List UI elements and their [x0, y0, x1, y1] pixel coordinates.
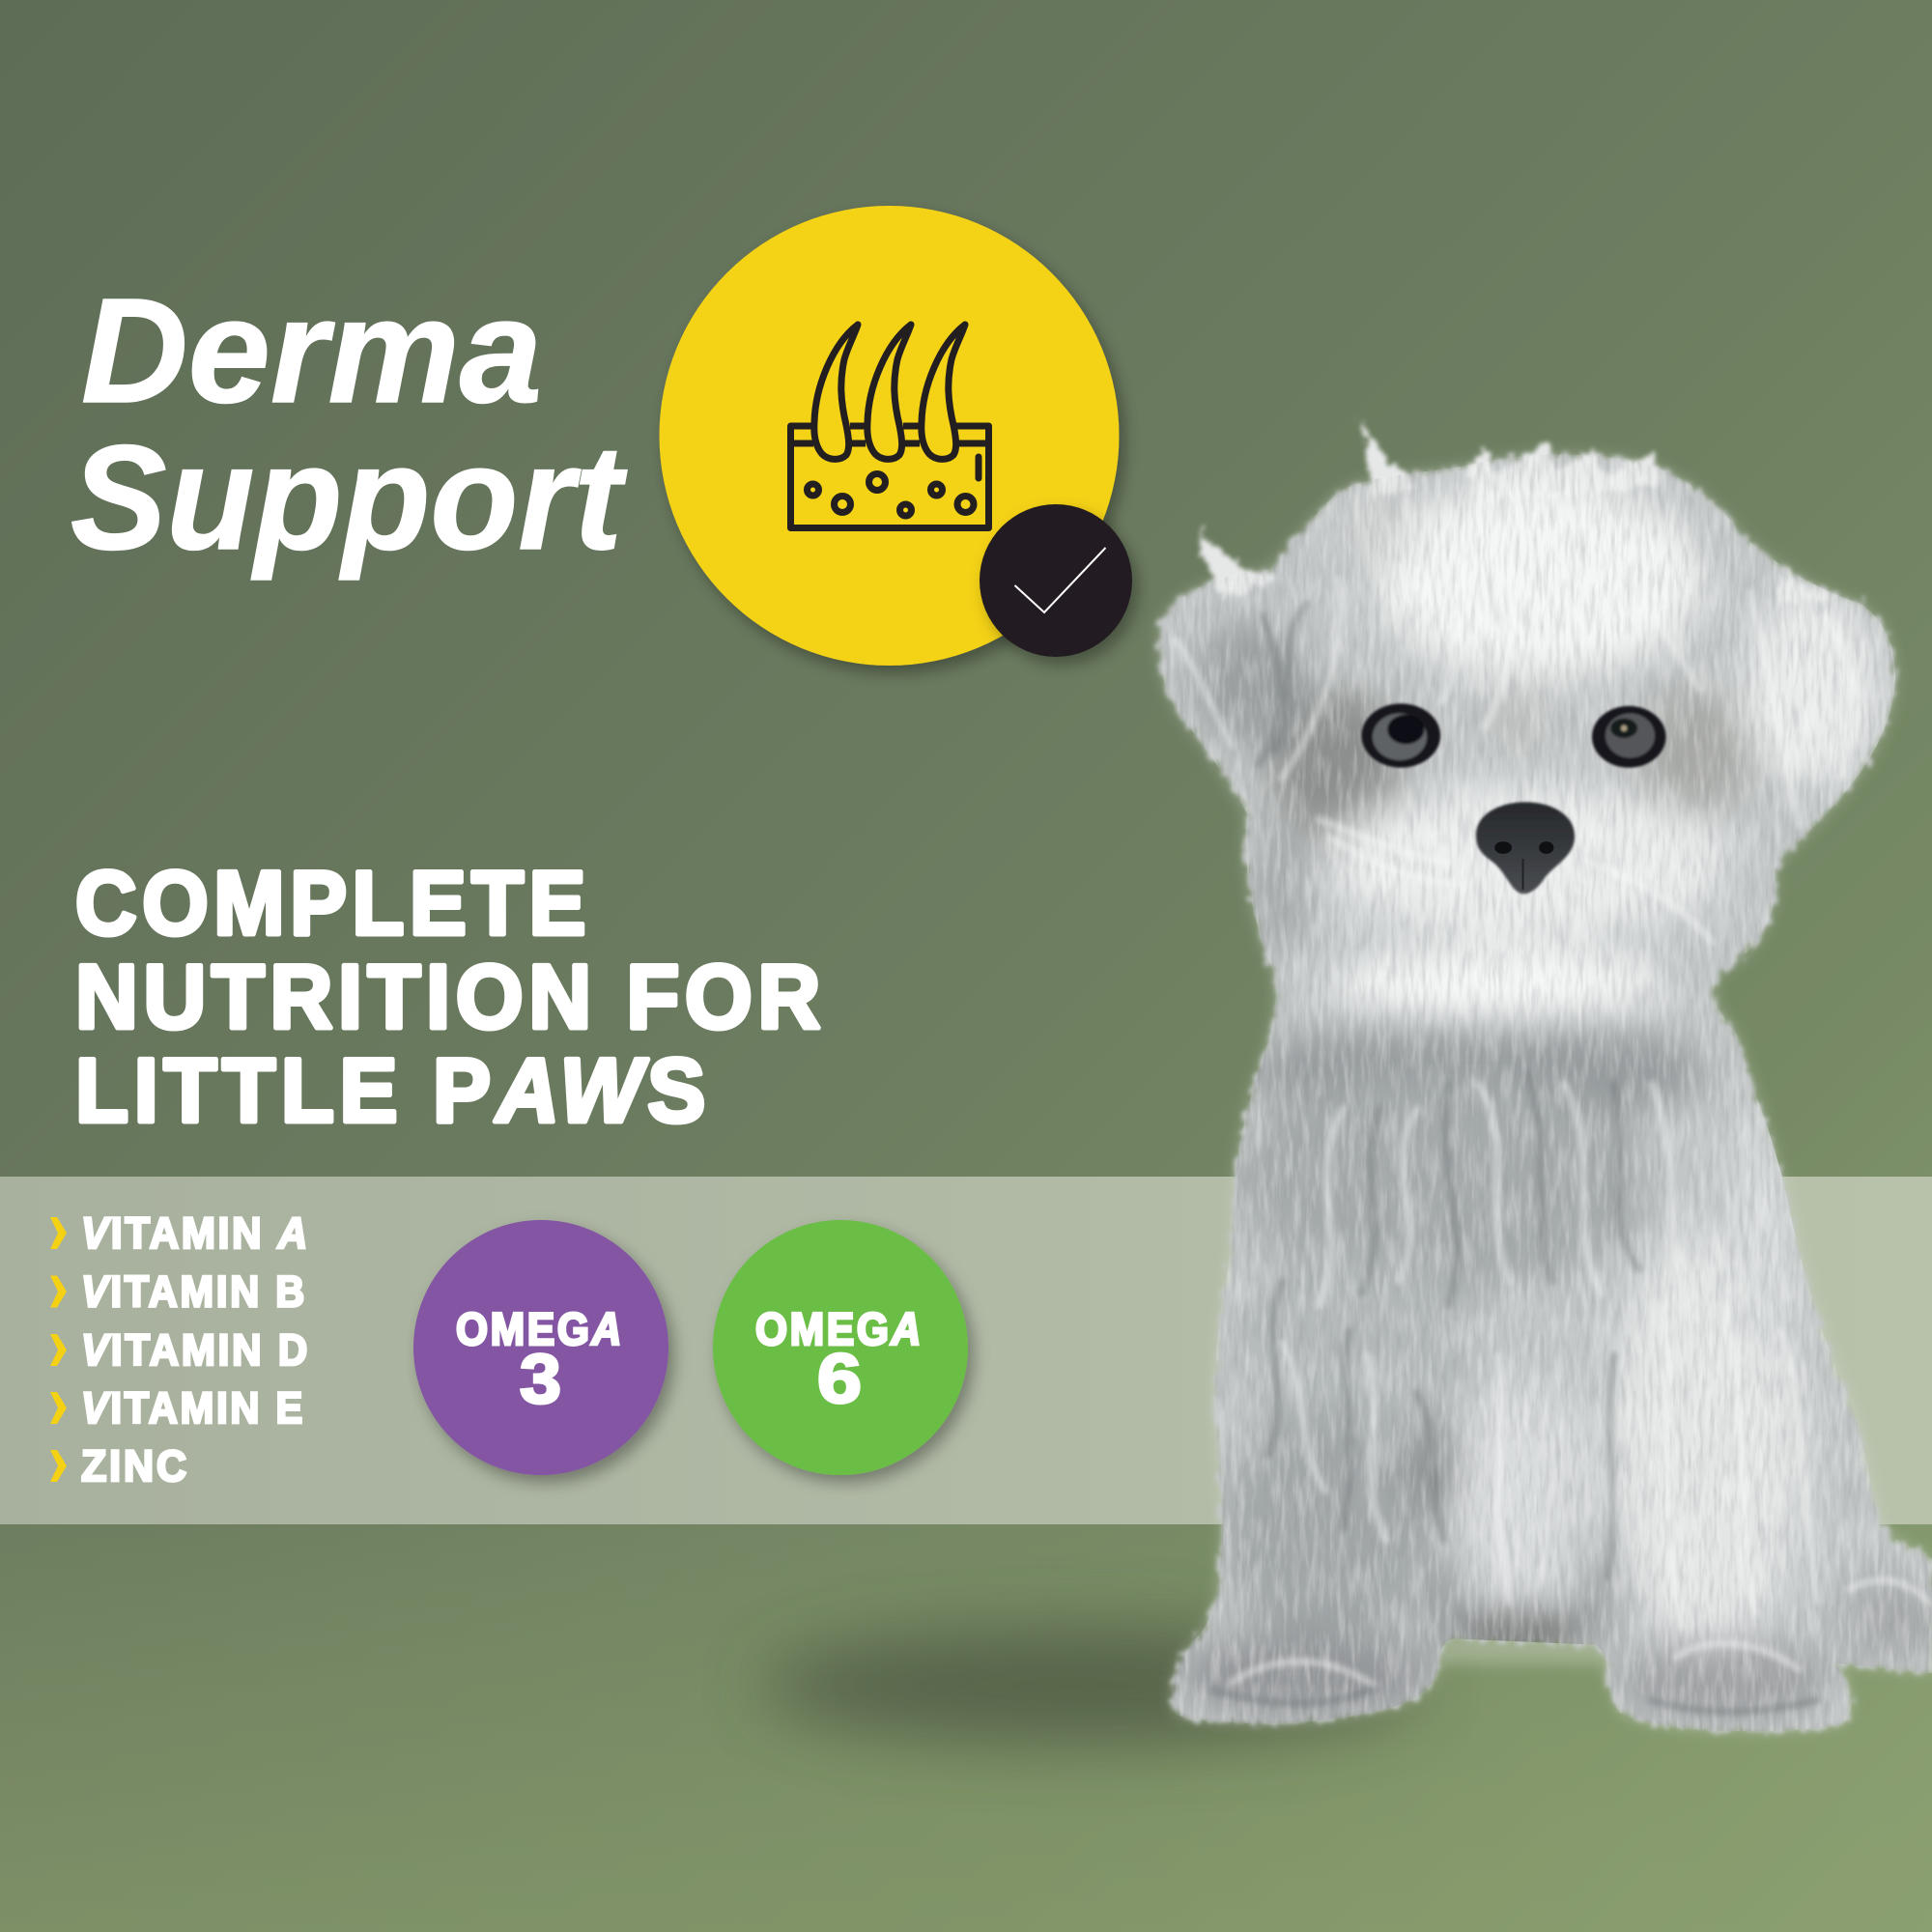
- badge: omega 3: OMEGA: [456, 1303, 624, 1354]
- vitamin labels: ZINC: [81, 1441, 189, 1491]
- floor tone: [0, 1524, 1932, 1932]
- title: Derma Support: Support: [71, 414, 628, 581]
- badge: omega 6: 6: [817, 1341, 862, 1418]
- headline: complete nutrition: NUTRITION FOR: [75, 946, 826, 1047]
- badge: omega 6: OMEGA: [755, 1303, 923, 1354]
- bullets: yellow chevrons: [50, 1217, 67, 1482]
- badge: omega 6: [713, 1220, 968, 1475]
- face tone: [1191, 480, 1879, 1018]
- vitamin labels: VITAMIN E: [81, 1383, 305, 1433]
- vitamin labels: VITAMIN B: [81, 1267, 307, 1316]
- eye: right: [1592, 706, 1665, 768]
- puppy silhouette: [1158, 416, 1932, 1731]
- headline: complete nutrition: COMPLETE: [75, 852, 591, 953]
- stray wisps on head: [1198, 416, 1836, 604]
- vitamin labels: [81, 1208, 310, 1491]
- vitamin labels: VITAMIN A: [81, 1208, 310, 1258]
- eye: left: [1361, 703, 1440, 768]
- nose: [1476, 802, 1575, 894]
- title: Derma Support: [71, 268, 628, 581]
- dark fur locks: [1213, 604, 1817, 1712]
- puppy halo: [1158, 454, 1932, 1731]
- puppy illustration: [1146, 407, 1932, 1749]
- fur noise: [1146, 407, 1932, 1749]
- vitamin labels: VITAMIN D: [81, 1325, 310, 1375]
- vitamin list: [50, 1208, 310, 1491]
- vitamin band: [0, 1177, 1932, 1524]
- title: Derma Support: Derma: [81, 268, 542, 434]
- headline: complete nutrition: LITTLE PAWS: [75, 1039, 711, 1141]
- check mark badge: [980, 504, 1132, 657]
- yellow circle: [659, 206, 1119, 666]
- badge: skin and hair icon: [659, 206, 1132, 666]
- badge: omega 3: [413, 1220, 668, 1475]
- icon: hair follicles in skin: [790, 325, 989, 527]
- light fur locks: [1177, 529, 1928, 1686]
- badge: omega 3: 3: [520, 1341, 561, 1418]
- body shading: [1146, 407, 1932, 1749]
- floor shadow: [763, 1628, 1420, 1744]
- chest and legs tone: [1177, 1020, 1932, 1723]
- headline: complete nutrition: [75, 852, 826, 1141]
